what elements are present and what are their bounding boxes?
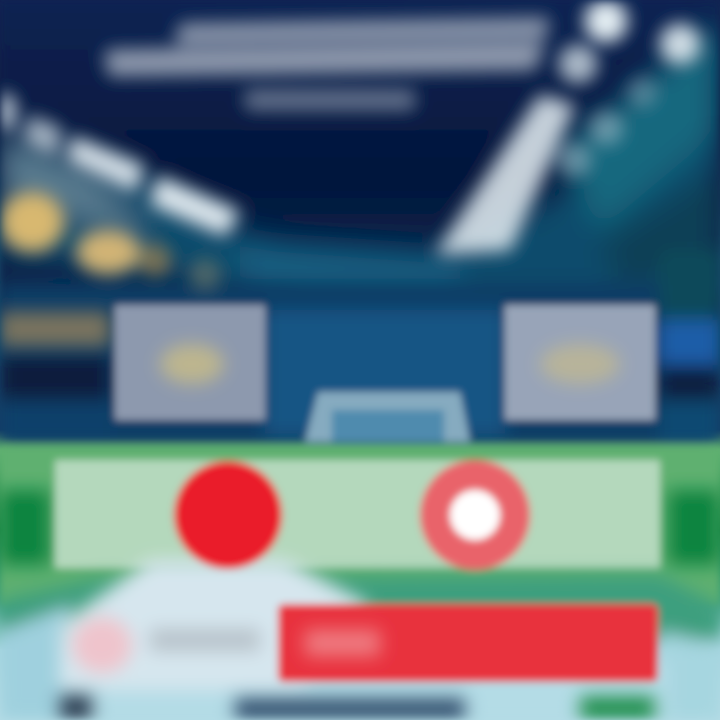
red banner [278, 604, 658, 682]
left roof lights [0, 92, 240, 236]
pitch overlay panel [55, 460, 660, 568]
left info panel [115, 305, 265, 420]
night sky background [0, 0, 720, 320]
right roof lights [435, 0, 700, 255]
bottom dark strip [60, 695, 655, 720]
red circle [174, 461, 282, 569]
goal [305, 392, 470, 442]
title text placeholder, illegible in reference [105, 18, 550, 110]
red ring circle with white centre [420, 460, 530, 570]
warm stand lights [0, 192, 221, 346]
stadium roof band [0, 20, 720, 300]
left white bottom card [60, 560, 370, 690]
stands and lower tier [0, 250, 720, 445]
pitch [0, 445, 720, 605]
lower strip [0, 575, 720, 720]
right info panel [505, 305, 655, 420]
